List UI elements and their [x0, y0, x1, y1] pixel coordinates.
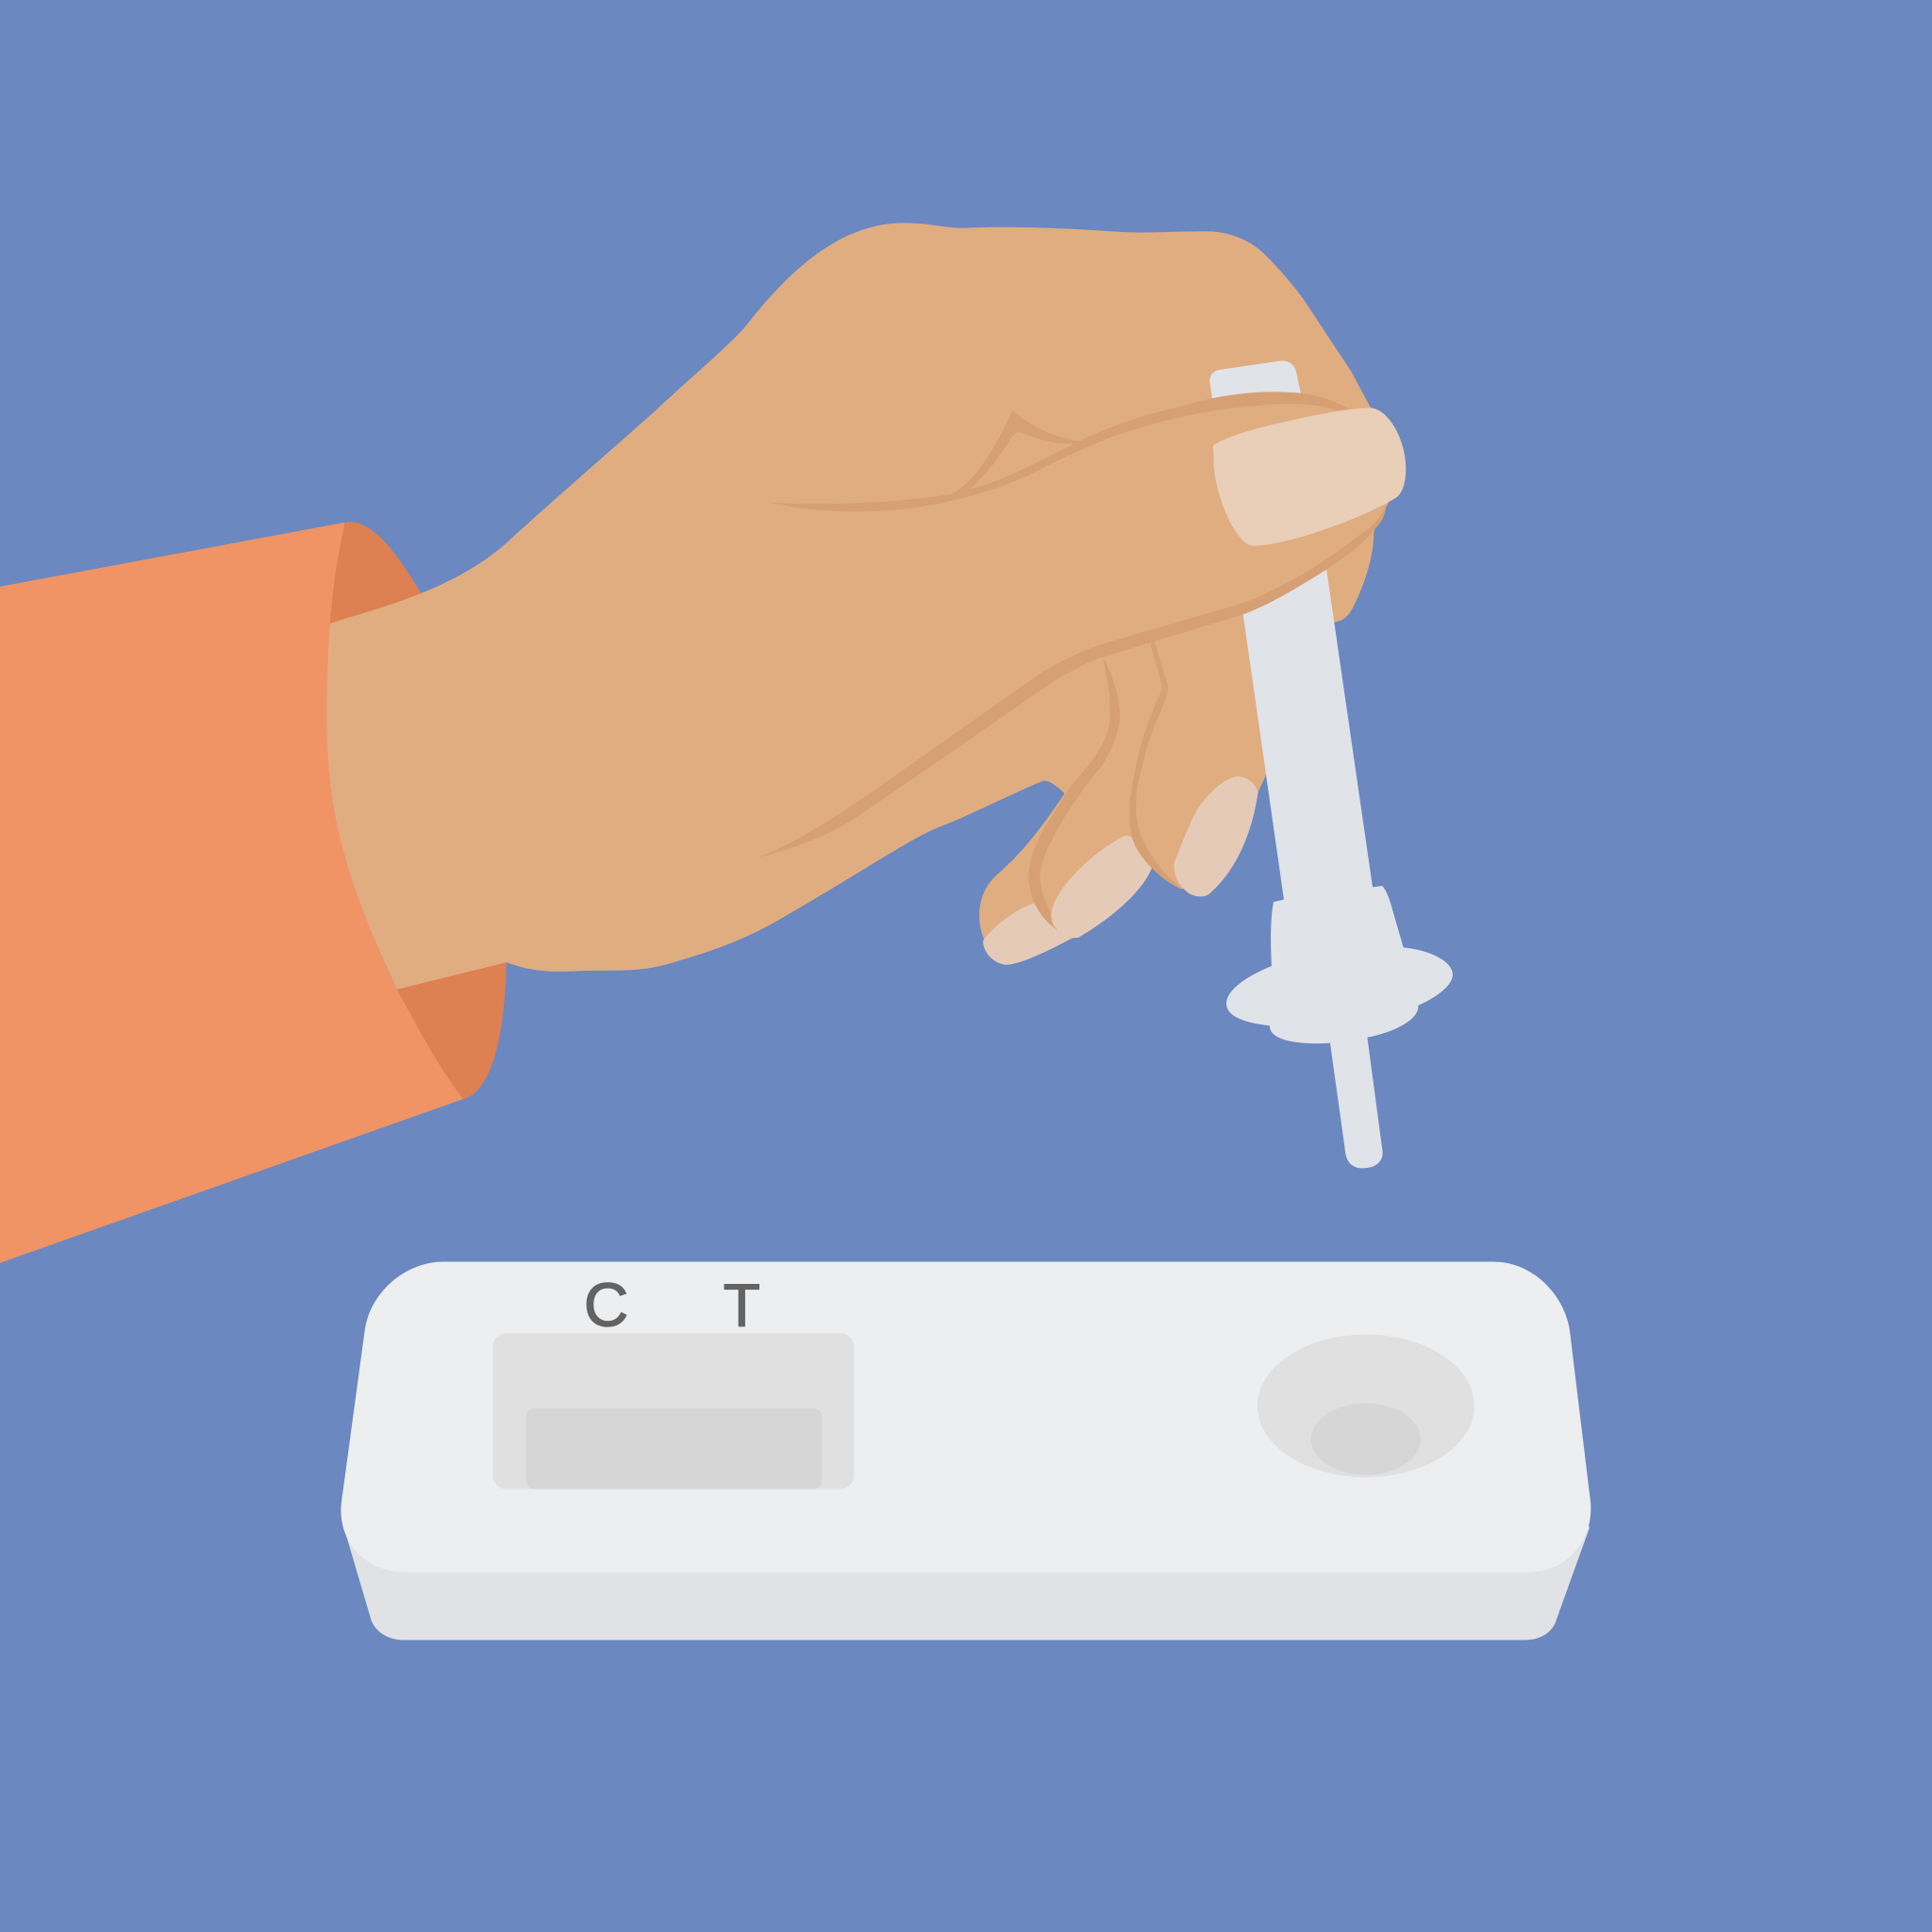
pinky nail [983, 903, 1071, 965]
label T: T [724, 1271, 760, 1339]
sleeve inner back [314, 522, 422, 641]
thumb skin [764, 393, 1405, 850]
cassette side face [342, 1478, 1590, 1640]
middle nail [1051, 836, 1152, 938]
finger crease 2 [1129, 639, 1183, 890]
label C: C [584, 1270, 628, 1339]
sleeve inner front [397, 962, 507, 1099]
thumbnail [1213, 408, 1406, 546]
sleeve [0, 523, 463, 1263]
thumb [758, 391, 1406, 858]
sample well [1257, 1335, 1474, 1477]
finger crease 1 [1028, 657, 1120, 937]
result window [492, 1333, 854, 1489]
cassette top face [341, 1261, 1591, 1573]
test cassette [341, 1261, 1591, 1640]
ring nail [1174, 776, 1258, 896]
thumb upper crease [770, 391, 1349, 511]
result strip [526, 1408, 822, 1489]
dropper [1209, 360, 1453, 1168]
hand body [295, 223, 1390, 990]
sample well centre [1311, 1404, 1421, 1474]
fingers [983, 639, 1258, 965]
thumb lower crease [758, 504, 1386, 858]
